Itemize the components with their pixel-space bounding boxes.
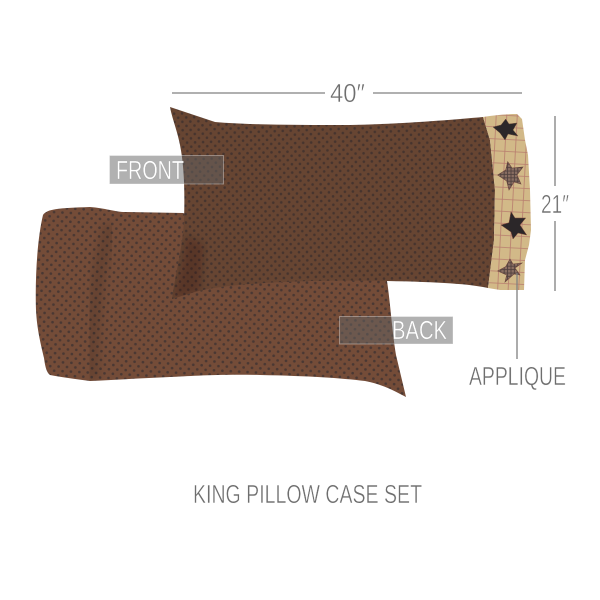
callout: applique: [469, 273, 566, 391]
star: plaid upper: [498, 162, 523, 190]
dimension: width 40 inches: 40″: [330, 78, 365, 108]
star: plaid bottom: [498, 259, 522, 282]
caption: KING PILLOW CASE SET: [193, 479, 422, 509]
back pillow case: [36, 207, 406, 397]
label: BACK: [340, 315, 453, 345]
appliqué cuff: [483, 114, 531, 290]
label: BACK: BACK: [392, 315, 448, 345]
callout: applique: APPLIQUE: [469, 361, 566, 391]
label: FRONT: FRONT: [116, 155, 184, 185]
front pillow case: [170, 107, 531, 299]
dimension: height 21 inches: 21″: [541, 189, 569, 219]
star: black top: [493, 119, 518, 140]
star: black lower: [501, 212, 527, 239]
